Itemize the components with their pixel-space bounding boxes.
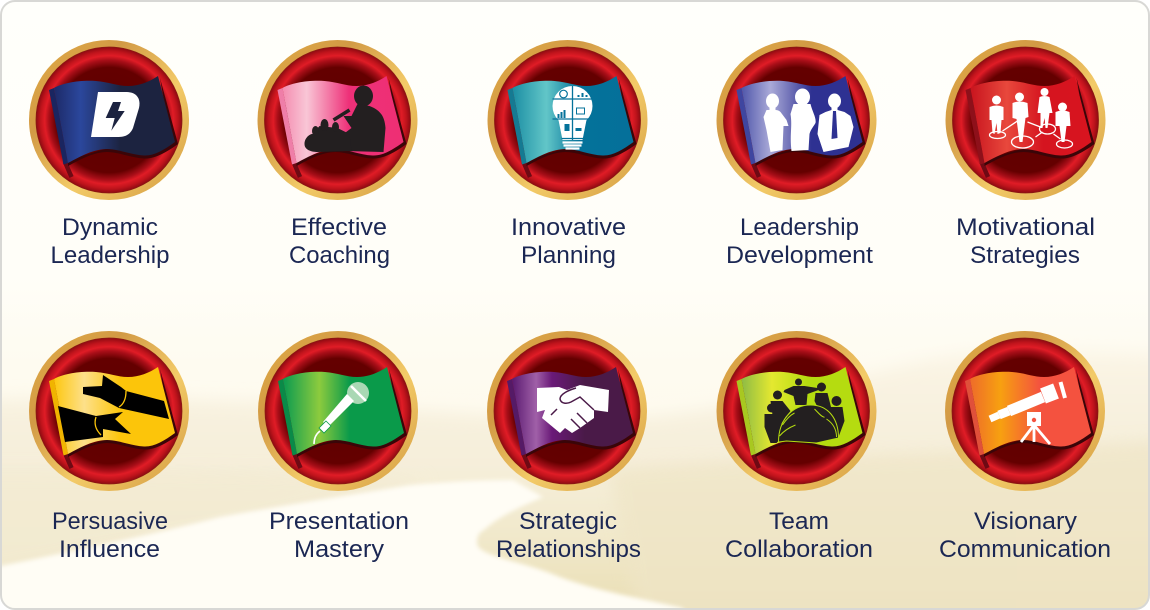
label: Strategic <box>519 508 617 535</box>
label: Visionary <box>974 508 1077 535</box>
item: Visionary Communication <box>939 331 1111 563</box>
badge: navy flag with D bolt <box>29 40 189 200</box>
item: Innovative Planning <box>488 40 648 269</box>
label: Influence <box>59 536 160 563</box>
label <box>52 508 168 563</box>
badge: red flag with networked people <box>946 40 1106 200</box>
label <box>50 214 170 269</box>
label: Innovative <box>511 214 626 241</box>
label <box>289 214 390 269</box>
badge: purple flag with handshake <box>487 331 647 491</box>
item: Leadership Development <box>716 40 876 269</box>
badge: pink flag with speaker and audience <box>258 40 418 200</box>
label: Relationships <box>496 536 641 563</box>
card background with faded landscape <box>2 286 1148 608</box>
label: Dynamic <box>62 214 158 241</box>
item: Motivational Strategies <box>946 40 1106 269</box>
label: Leadership <box>740 214 859 241</box>
label: Planning <box>521 242 616 269</box>
badge: lime flag with team around a table <box>716 331 876 491</box>
label <box>726 214 873 269</box>
label <box>939 508 1111 563</box>
label <box>496 508 641 563</box>
badge: blue flag with three professionals <box>716 40 876 200</box>
badge: yellow flag with pointing hands <box>29 331 189 491</box>
label: Mastery <box>294 536 384 563</box>
label: Leadership <box>50 242 170 269</box>
badge: orange flag with telescope <box>945 331 1105 491</box>
label: Effective <box>291 214 387 241</box>
label: Strategies <box>970 242 1080 269</box>
label: Team <box>769 508 829 535</box>
label <box>511 214 626 269</box>
label: Motivational <box>956 214 1095 241</box>
label <box>725 508 873 563</box>
item: Presentation Mastery <box>258 331 418 563</box>
label <box>269 508 409 563</box>
label <box>956 214 1095 269</box>
label: Coaching <box>289 242 390 269</box>
item: Persuasive Influence <box>29 331 189 563</box>
label: Presentation <box>269 508 409 535</box>
item: Effective Coaching <box>258 40 418 269</box>
badge: green flag with microphone <box>258 331 418 491</box>
item: Team Collaboration <box>716 331 876 563</box>
badge: teal flag with light bulb <box>488 40 648 200</box>
item: Dynamic Leadership <box>29 40 189 269</box>
label: Development <box>726 242 873 269</box>
item: Strategic Relationships <box>487 331 647 563</box>
label: Collaboration <box>725 536 873 563</box>
label: Communication <box>939 536 1111 563</box>
label: Persuasive <box>52 508 168 535</box>
